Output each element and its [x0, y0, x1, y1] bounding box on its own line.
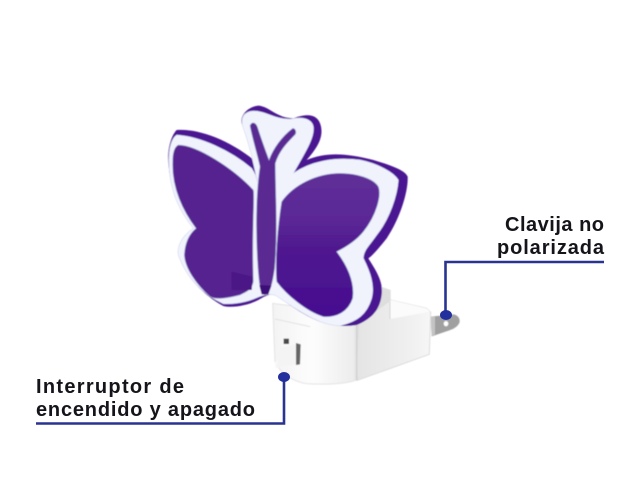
plug prong	[431, 314, 460, 336]
power switch	[275, 338, 301, 368]
left wing purple	[173, 145, 254, 298]
dark back layer	[168, 106, 408, 326]
side block	[357, 300, 431, 380]
marker dot	[440, 310, 452, 320]
butterfly body	[168, 106, 408, 326]
leader line	[36, 377, 284, 424]
plug housing	[273, 286, 431, 384]
marker dot	[278, 372, 290, 382]
front block	[273, 303, 360, 384]
label text: polarizada	[497, 237, 605, 259]
callout: clavija no polarizada	[440, 214, 605, 320]
white front layer	[169, 111, 398, 326]
butterfly torso and antennae	[250, 123, 296, 295]
right wing purple	[276, 173, 379, 317]
label text: Interruptor de	[36, 376, 184, 398]
rear step	[373, 286, 391, 312]
label text: Clavija no	[505, 214, 604, 236]
label text: encendido y apagado	[36, 399, 255, 421]
label text	[497, 214, 605, 259]
label text	[36, 376, 255, 421]
leader line	[446, 262, 604, 315]
product: butterfly night light	[168, 106, 460, 384]
callout: interruptor de encendido y apagado	[36, 372, 290, 424]
top facet	[390, 300, 430, 319]
